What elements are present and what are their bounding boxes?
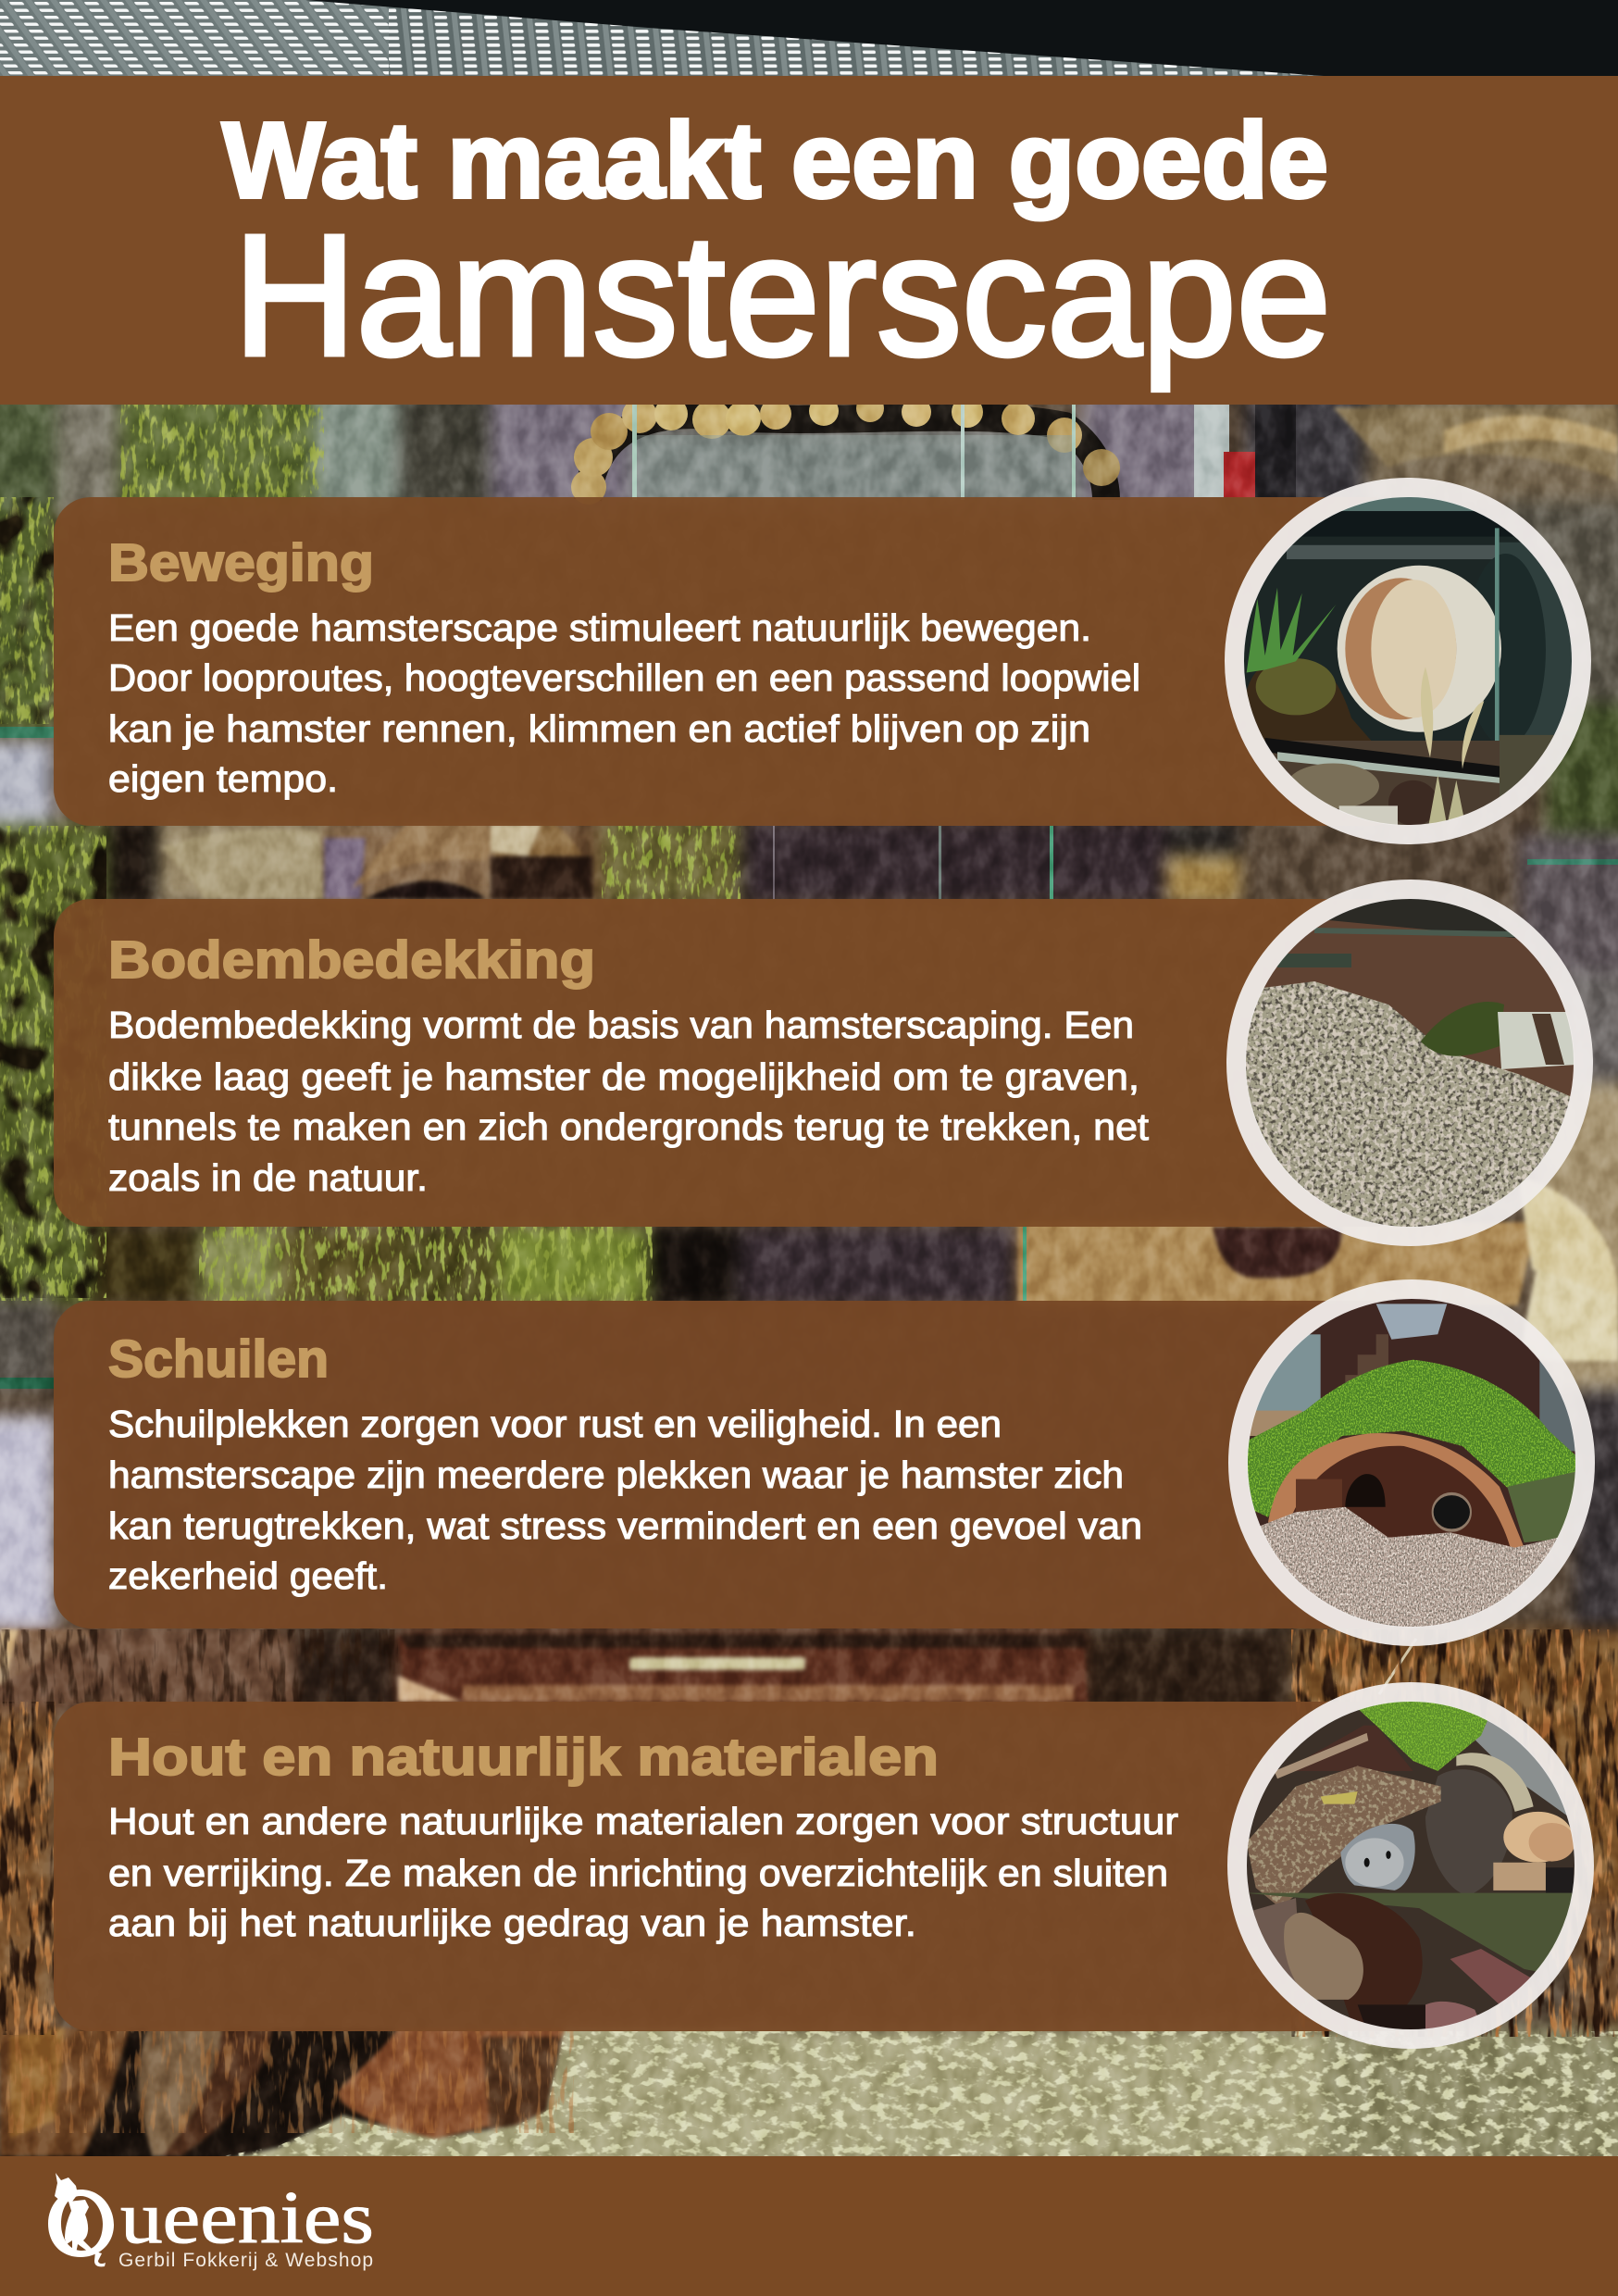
panel: Beweging — [54, 463, 1618, 860]
heading: Schuilen — [108, 1329, 329, 1389]
body text: kan je hamster rennen, klimmen en actief blijven op zijn — [108, 707, 1090, 750]
panel: Bodembedekking — [54, 889, 1583, 1237]
title banner — [0, 76, 1618, 405]
photo circle: hamster between wood and cork — [1237, 1692, 1585, 2040]
wood piece right — [1018, 1176, 1618, 1361]
logo tagline: Gerbil Fokkerij & Webshop — [118, 2250, 373, 2271]
body text: dikke laag geeft je hamster de mogelijkheid om te graven, — [108, 1055, 1139, 1098]
photo circle: running wheel — [1225, 478, 1591, 844]
body text: eigen tempo. — [108, 757, 338, 800]
body text: Bodembedekking vormt de basis van hamsterscaping. Een — [108, 1004, 1134, 1046]
title line 2: Hamsterscape — [233, 200, 1331, 392]
body text: zoals in de natuur. — [108, 1156, 428, 1199]
body text: Een goede hamsterscape stimuleert natuurlijk bewegen. — [108, 606, 1091, 649]
body text: en verrijking. Ze maken de inrichting overzichtelijk en sluiten — [108, 1852, 1168, 1894]
perforated mesh lid at the top — [0, 0, 1618, 76]
heading: Bodembedekking — [108, 930, 595, 990]
body text: Door looproutes, hoogteverschillen en een passend loopwiel — [108, 656, 1140, 699]
logo Q with gerbil — [48, 2173, 114, 2266]
body text: tunnels te maken en zich ondergronds terug te trekken, net — [108, 1105, 1150, 1148]
photo circle: hiding cave — [1238, 1289, 1585, 1654]
glass lines — [0, 727, 1618, 1694]
panel: Schuilen — [54, 1289, 1585, 1654]
cork and bark on the shelf — [0, 824, 1088, 1702]
panel: Hout en natuurlijk materialen — [54, 1692, 1585, 2040]
title line 1: Wat maakt een goede — [222, 100, 1328, 220]
heading: Hout en natuurlijk materialen — [108, 1728, 939, 1787]
photo circle: bedding — [1237, 889, 1583, 1237]
wooden hut roof top right — [1333, 407, 1618, 481]
logo: Queenies — [48, 2173, 374, 2271]
bottom logs and wood chips — [0, 2028, 741, 2162]
logo wordmark: ueenies — [120, 2177, 374, 2259]
body text: kan terugtrekken, wat stress vermindert en een gevoel van — [108, 1504, 1142, 1547]
footer band — [0, 2156, 1618, 2296]
body text — [108, 606, 1140, 800]
body text — [108, 1004, 1150, 1199]
red pipe and post — [1194, 405, 1296, 498]
body text: Hout en andere natuurlijke materialen zorgen voor structuur — [108, 1800, 1178, 1842]
log ring around the glass — [571, 394, 1120, 505]
heading: Beweging — [108, 533, 374, 593]
body text — [108, 1800, 1178, 1944]
body text: hamsterscape zijn meerdere plekken waar je hamster zich — [108, 1454, 1124, 1496]
moss, chips and fibre textures — [0, 405, 1618, 2156]
body text: Schuilplekken zorgen voor rust en veiligheid. In een — [108, 1403, 1002, 1445]
body text: aan bij het natuurlijke gedrag van je hamster. — [108, 1902, 916, 1944]
body text — [108, 1403, 1142, 1597]
body text: zekerheid geeft. — [108, 1554, 388, 1597]
